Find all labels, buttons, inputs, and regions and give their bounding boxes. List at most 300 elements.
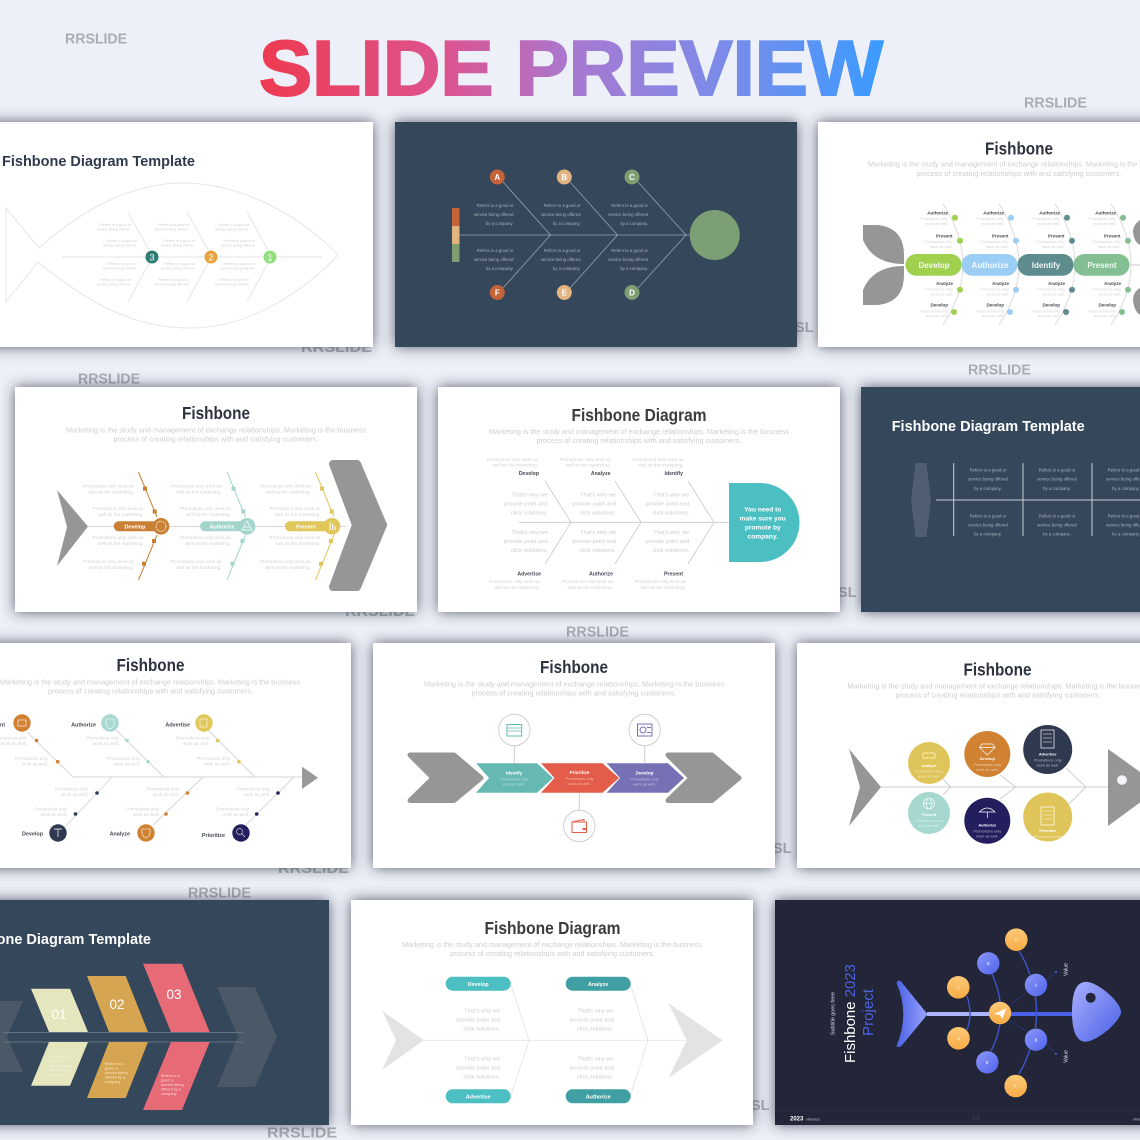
bone captions: Promotions only <box>146 786 180 792</box>
top labels: well as the marketing. <box>566 462 611 468</box>
column: develop: work as well. <box>926 313 948 318</box>
column: develop: Promotions only <box>925 239 953 244</box>
segment 02: 02 <box>109 997 125 1012</box>
bone captions: Refers to a good or <box>611 248 649 253</box>
teal head with message: company. <box>748 534 778 540</box>
bone captions: work as well. <box>41 812 67 817</box>
column: authorize: work as well. <box>986 244 1008 249</box>
centre captions: provide point and <box>504 539 548 545</box>
branch captions: well as the marketing. <box>89 490 134 494</box>
node: present: work as well. <box>918 823 940 828</box>
subtitle: process of creating relationships with and satisfying customers. <box>916 169 1122 178</box>
column: identify: Promotions only <box>1037 286 1065 292</box>
fish tail <box>896 981 928 1047</box>
node: develop: Promotions only <box>973 762 1001 767</box>
column: develop: Develop <box>918 261 950 270</box>
column: authorize: Authorize <box>983 210 1004 216</box>
branch captions: well as the marketing. <box>176 565 222 570</box>
heading: Fishbone Diagram <box>484 918 620 938</box>
develop branch: Develop <box>125 524 146 530</box>
node labels <box>0 722 225 839</box>
bone captions: Promotions only <box>15 756 49 761</box>
fish tail colour bar <box>452 208 460 262</box>
vertical title <box>830 964 877 1063</box>
present branch <box>285 472 340 580</box>
identify chevron: Identify <box>506 770 523 776</box>
tail arrow <box>849 749 881 826</box>
top labels: Identify <box>665 471 683 477</box>
spine <box>927 1012 1072 1016</box>
segment 02 <box>87 976 148 1098</box>
spine rails <box>3 1032 243 1042</box>
bone captions: service being offered. <box>97 282 131 286</box>
branch captions: Promotions only work as <box>180 535 232 540</box>
subtitle: Marketing is the study and management of exchange relationships. Marketing is the business <box>66 426 366 434</box>
footer: 2023 <box>790 1116 804 1122</box>
column: identify: work as well. <box>1038 221 1060 226</box>
bone captions: service being offered <box>608 212 649 217</box>
pill labels: Develop <box>468 982 489 988</box>
bone captions: Promotions only <box>34 806 68 812</box>
develop chevron: work as well. <box>633 782 656 786</box>
fish head <box>1072 982 1121 1042</box>
column: authorize: Promotions only <box>981 286 1009 292</box>
column: identify: Promotions only <box>1032 216 1060 221</box>
heading: Fishbone Diagram <box>572 405 706 425</box>
column: present: Promotions only <box>1088 216 1116 221</box>
bottom labels: Promotions only work as <box>562 579 614 584</box>
column: develop: Promotions only <box>920 308 948 314</box>
watermarks: RRSLIDE <box>345 604 415 620</box>
bone captions: work as well. <box>133 812 159 817</box>
centre captions: That's why we <box>653 530 689 536</box>
spine and bones <box>881 768 1108 807</box>
bone captions: service being offered. <box>97 228 131 232</box>
panel: fish outline slide <box>0 122 373 347</box>
bone captions: work as well. <box>114 762 140 766</box>
bottom labels: well as the marketing. <box>641 585 686 590</box>
centre captions: click solutions. <box>579 548 616 554</box>
column: identify: Promotions only <box>1037 239 1065 244</box>
bone captions: by a company. <box>1043 486 1071 491</box>
column: develop: Analyze <box>936 281 953 286</box>
spine <box>88 526 346 528</box>
bone captions: by a company. <box>620 266 648 271</box>
column: identify: Present <box>1048 234 1065 238</box>
value labels: Value <box>1064 963 1070 976</box>
column: authorize: Promotions only <box>981 239 1009 244</box>
panel: dark gradient fish slide <box>775 900 1140 1125</box>
bone captions: Refers to a good or <box>544 203 581 208</box>
watermarks: RRSLIDE <box>1024 96 1087 112</box>
column: develop: work as well. <box>931 292 953 296</box>
watermarks: RRSLIDE <box>301 340 372 356</box>
bone captions: service being offered <box>968 476 1009 482</box>
prioritize chevron: work as well. <box>568 781 591 786</box>
icon nodes <box>13 714 250 842</box>
segment 03: Refers to a <box>161 1073 181 1078</box>
node: advertise: Promotions only <box>1034 758 1062 762</box>
bone captions: by a company. <box>486 266 514 271</box>
segment 01: company. <box>49 1072 66 1077</box>
column: develop: Promotions only <box>920 216 948 221</box>
top labels <box>487 457 684 477</box>
pill labels: Authorize <box>586 1094 611 1100</box>
captions: That's why we <box>578 1056 614 1062</box>
watermarks: SL <box>773 841 792 857</box>
bone captions: work as well. <box>183 741 209 746</box>
column: develop: work as well. <box>930 244 952 249</box>
develop chevron: Promotions only <box>631 776 658 782</box>
branch captions: Promotions only work as <box>269 506 321 511</box>
node: prioritize <box>1023 792 1072 844</box>
node: prioritize: work as well. <box>1037 839 1059 844</box>
bone captions: service being offered. <box>221 266 255 270</box>
centre captions: click solutions. <box>652 510 689 516</box>
panel: fishbone diagram with teal head <box>438 387 840 612</box>
bone captions: Promotions only <box>237 786 271 792</box>
segment 03: company. <box>161 1091 177 1096</box>
column: identify: work as well. <box>1038 313 1060 318</box>
column: present: Promotions only <box>1093 239 1121 244</box>
segment 01: offered by a <box>49 1068 71 1072</box>
captions: click solutions. <box>463 1074 500 1080</box>
column: identify: Promotions only <box>1032 308 1060 314</box>
node: analyze: work as well. <box>918 774 940 778</box>
column: develop: Promotions only <box>925 286 953 292</box>
heading: Fishbone <box>116 655 185 675</box>
column: develop: Authorize <box>927 210 948 216</box>
column: present: Develop <box>1098 303 1116 308</box>
node: authorize <box>964 798 1010 844</box>
heading: Fishbone <box>540 657 608 677</box>
captions: That's why we <box>464 1056 500 1062</box>
node labels: Analyze <box>110 832 130 838</box>
left tail chevron <box>0 1001 23 1072</box>
bone captions: Refers to a good or <box>106 239 138 243</box>
bone captions: service being offered. <box>103 266 137 270</box>
segment 02: good or <box>105 1066 119 1070</box>
lettered nodes: A <box>494 173 500 182</box>
authorize branch: Authorize <box>210 524 234 530</box>
bone captions: Refers to a good or <box>100 278 132 282</box>
branch captions: Promotions only work as <box>260 484 312 488</box>
head circle <box>690 210 740 260</box>
pill labels: Analyze <box>588 982 608 988</box>
watermarks: RRSLIDE <box>188 886 251 902</box>
bone captions: Refers to a good or <box>477 248 514 253</box>
centre captions: provide point and <box>504 502 548 508</box>
branch captions: Promotions only work as <box>269 535 321 540</box>
segment 02: offered by a <box>105 1074 126 1080</box>
bone captions: service being offered. <box>215 282 249 286</box>
column: identify: Identify <box>1032 261 1061 270</box>
grey head chevron <box>668 755 739 800</box>
centre captions: provide point and <box>645 539 689 545</box>
subtitle: process of creating relationships with and satisfying customers. <box>48 686 253 696</box>
segment 02: company. <box>105 1079 121 1084</box>
bone captions: by a company. <box>1112 532 1140 536</box>
subtitle <box>402 940 702 958</box>
bone captions: service being offered <box>541 257 581 262</box>
bone captions: Refers to a good or <box>218 278 250 282</box>
captions: click solutions. <box>463 1026 500 1032</box>
watermarks: SL <box>795 320 814 336</box>
bone captions: Refers to a good or <box>970 514 1007 518</box>
column: present: Promotions only <box>1093 286 1121 292</box>
column: present <box>1074 204 1131 325</box>
captions: provide point and <box>570 1018 614 1024</box>
segment 02: service being <box>105 1070 128 1075</box>
branch captions: Promotions only work as <box>180 506 232 511</box>
column: develop: Develop <box>930 303 948 308</box>
column: present: work as well. <box>1094 313 1116 318</box>
column: identify: Authorize <box>1039 210 1060 216</box>
subtitle <box>868 160 1140 178</box>
panel: dark numbered chevron slide <box>0 900 329 1125</box>
branch captions: Promotions only work as <box>83 484 135 488</box>
column: present: Promotions only <box>1088 308 1116 314</box>
lettered nodes: B <box>561 173 567 182</box>
node: authorize: work as well. <box>976 834 998 838</box>
node: prioritize: Promotions only <box>1034 834 1062 839</box>
captions: That's why we <box>578 1008 614 1014</box>
bottom labels: well as the marketing. <box>568 585 613 590</box>
subtitle <box>0 678 300 696</box>
subtitle: Marketing is the study and management of exchange relationships. Marketing is the business <box>0 678 300 686</box>
segment 03: offered by a <box>161 1086 182 1092</box>
bone captions: Promotions only <box>55 786 89 792</box>
present branch: Present <box>296 524 316 530</box>
pill labels <box>446 977 631 1103</box>
column: identify <box>1018 204 1075 325</box>
tail arrow <box>57 490 88 566</box>
centre captions: click solutions. <box>511 510 548 516</box>
branch captions: well as the marketing. <box>275 541 320 546</box>
arrow head <box>302 767 318 789</box>
bone captions: Refers to a good or <box>224 239 256 243</box>
bone captions: work as well. <box>1 741 27 746</box>
bone captions: service being offered. <box>103 244 137 248</box>
bone captions: Promotions only <box>176 736 210 740</box>
centre captions: That's why we <box>512 530 548 536</box>
heading: Fishbone Diagram Template <box>2 153 195 170</box>
captions: That's why we <box>464 1008 500 1014</box>
segment 03 <box>143 964 210 1110</box>
bone captions: work as well. <box>204 762 230 766</box>
centre captions: That's why we <box>580 530 616 536</box>
footer: vibrance <box>806 1118 820 1122</box>
bottom labels: Promotions only work as <box>489 579 541 584</box>
branch captions: Promotions only work as <box>92 535 144 540</box>
watermarks: RRSLIDE <box>566 624 629 640</box>
bone captions: service being offered <box>1037 476 1078 482</box>
bones <box>519 481 729 564</box>
bone captions: Refers to a good or <box>1039 468 1076 472</box>
column: identify: work as well. <box>1042 244 1064 249</box>
heading: Fishbone <box>182 403 250 423</box>
bone captions: Refers to a good or <box>158 278 190 282</box>
bone captions: service being offered. <box>161 244 195 248</box>
centre captions <box>504 492 689 554</box>
centre captions: That's why we <box>653 492 689 498</box>
segment 03: good or <box>161 1078 175 1082</box>
title: SLIDE PREVIEW <box>259 24 883 112</box>
panel: three-pill fishbone slide <box>15 387 417 612</box>
vertical title: Subtitle goes here <box>830 992 836 1035</box>
segment 03: 03 <box>166 987 182 1002</box>
authorize branch <box>200 472 255 580</box>
bone captions: Refers to a good or <box>477 203 514 208</box>
bone captions: service being offered. <box>161 266 195 270</box>
column: authorize: Promotions only <box>976 216 1004 221</box>
column: authorize: Develop <box>986 303 1004 308</box>
bone captions <box>0 736 271 817</box>
value labels <box>1055 963 1070 1063</box>
subtitle: process of creating relationships with and satisfying customers. <box>472 688 676 698</box>
centre captions: That's why we <box>580 492 616 498</box>
bone captions: Refers to a good or <box>970 468 1007 472</box>
teal head with message: You need to <box>744 506 781 514</box>
prioritize chevron: Prioritize <box>570 770 590 775</box>
icon: safe <box>629 714 660 763</box>
top labels: Promotions only work as <box>560 457 612 462</box>
bottom labels: Authorize <box>589 572 613 578</box>
pill labels: Advertise <box>466 1094 490 1100</box>
bone captions: work as well. <box>93 741 119 746</box>
top labels: Develop <box>519 471 539 477</box>
branch captions: well as the marketing. <box>98 541 144 546</box>
lettered nodes: F <box>495 288 500 298</box>
column: present: work as well. <box>1098 244 1120 249</box>
node: develop <box>964 731 1010 777</box>
branch captions: well as the marketing. <box>266 565 311 570</box>
segment 02: Refers to a <box>105 1061 125 1066</box>
centre captions: That's why we <box>512 492 548 498</box>
bone captions: by a company. <box>553 221 580 226</box>
bone captions <box>968 468 1140 536</box>
node labels: Advertise <box>165 722 190 728</box>
bone captions: Refers to a good or <box>164 239 196 243</box>
nodes: B <box>1035 1037 1038 1042</box>
column: authorize: work as well. <box>982 313 1004 318</box>
node labels: Prioritize <box>202 833 225 839</box>
branch captions: well as the marketing. <box>186 512 231 517</box>
nodes: D <box>957 1036 960 1041</box>
subtitle: process of creating relationships with and satisfying customers. <box>536 436 742 445</box>
watermarks: RRSLIDE <box>78 372 140 388</box>
lettered nodes: E <box>562 288 568 298</box>
watermarks: RRSLIDE <box>968 362 1031 378</box>
nodes: C <box>1015 938 1018 942</box>
numbered nodes: 2 <box>208 252 214 262</box>
column: authorize: Analyze <box>992 281 1009 286</box>
subtitle <box>848 682 1140 700</box>
teal head with message: promote by <box>745 524 781 532</box>
centre node with paper plane <box>989 1002 1011 1024</box>
panel: pill fishbone slide <box>818 122 1140 347</box>
captions: click solutions. <box>577 1026 614 1032</box>
teal head with message <box>729 483 800 562</box>
teal head with message: make sure you <box>740 516 786 522</box>
column: present: Analyze <box>1104 281 1121 286</box>
prioritize chevron <box>541 763 619 793</box>
identify chevron <box>476 763 553 793</box>
bone captions: service being offered. <box>215 228 249 232</box>
prioritize chevron: Promotions only <box>566 776 593 781</box>
nodes: F <box>1014 1084 1017 1089</box>
bone captions: by a company. <box>486 221 514 226</box>
top labels: Promotions only work as <box>632 457 684 462</box>
captions: provide point and <box>456 1066 500 1072</box>
bone captions: service being offered <box>608 257 649 262</box>
nodes: A <box>1035 983 1038 988</box>
branch captions: Promotions only work as <box>83 559 135 564</box>
tail <box>863 225 904 305</box>
branch captions: Promotions only work as <box>170 484 222 488</box>
subtitle: process of creating relationships with and satisfying customers. <box>450 949 655 958</box>
column: present: Present <box>1104 234 1121 238</box>
branch captions: well as the marketing. <box>266 490 311 494</box>
node: advertise <box>1023 725 1072 774</box>
column: develop: work as well. <box>926 221 948 226</box>
bone captions: Promotions only <box>107 756 141 761</box>
numbered nodes: 3 <box>149 252 155 262</box>
bone captions: work as well. <box>153 792 179 797</box>
tail arrow <box>382 1011 424 1070</box>
develop chevron <box>607 763 684 793</box>
footer <box>775 1110 1140 1122</box>
numbered nodes: 1 <box>267 252 273 262</box>
bone captions: Refers to a good or <box>100 223 132 227</box>
node labels: Authorize <box>71 722 96 728</box>
bone captions: Refers to a good or <box>106 262 138 266</box>
node: develop: Develop <box>980 756 995 761</box>
top labels: Analyze <box>591 471 611 477</box>
spine and bones <box>27 730 302 828</box>
fish bones <box>62 212 322 302</box>
column: develop: Present <box>936 234 953 238</box>
nodes: A <box>957 985 960 990</box>
column: identify: work as well. <box>1043 292 1065 296</box>
value labels: Value <box>1064 1050 1070 1063</box>
spine and head fragments <box>1130 220 1140 315</box>
develop branch <box>114 472 169 580</box>
grey tail chevron <box>410 755 481 800</box>
bone captions: Refers to a good or <box>224 262 256 266</box>
node: analyze: Promotions only <box>915 768 943 774</box>
nodes: E <box>986 1060 989 1065</box>
bottom labels: well as the marketing. <box>495 585 540 590</box>
lettered nodes <box>490 170 640 300</box>
branch captions: well as the marketing. <box>89 565 134 570</box>
watermarks: RRSLIDE <box>65 32 127 48</box>
bone captions: service being offered <box>541 212 581 217</box>
subtitle <box>66 426 366 444</box>
bones <box>459 182 690 288</box>
bone captions: by a company. <box>1112 486 1140 491</box>
panel: icon-node fishbone slide <box>0 643 351 868</box>
heading: Fishbone Diagram Template <box>892 418 1085 435</box>
branch captions: Promotions only work as <box>260 559 312 564</box>
footer: 14 <box>972 1115 980 1122</box>
bone captions: work as well. <box>223 812 249 817</box>
bottom labels: Promotions only work as <box>635 579 687 584</box>
column: authorize: Authorize <box>972 261 1009 270</box>
heading: Fishbone <box>985 138 1053 158</box>
branch captions: well as the marketing. <box>176 490 222 494</box>
segment 01: 01 <box>51 1007 67 1022</box>
